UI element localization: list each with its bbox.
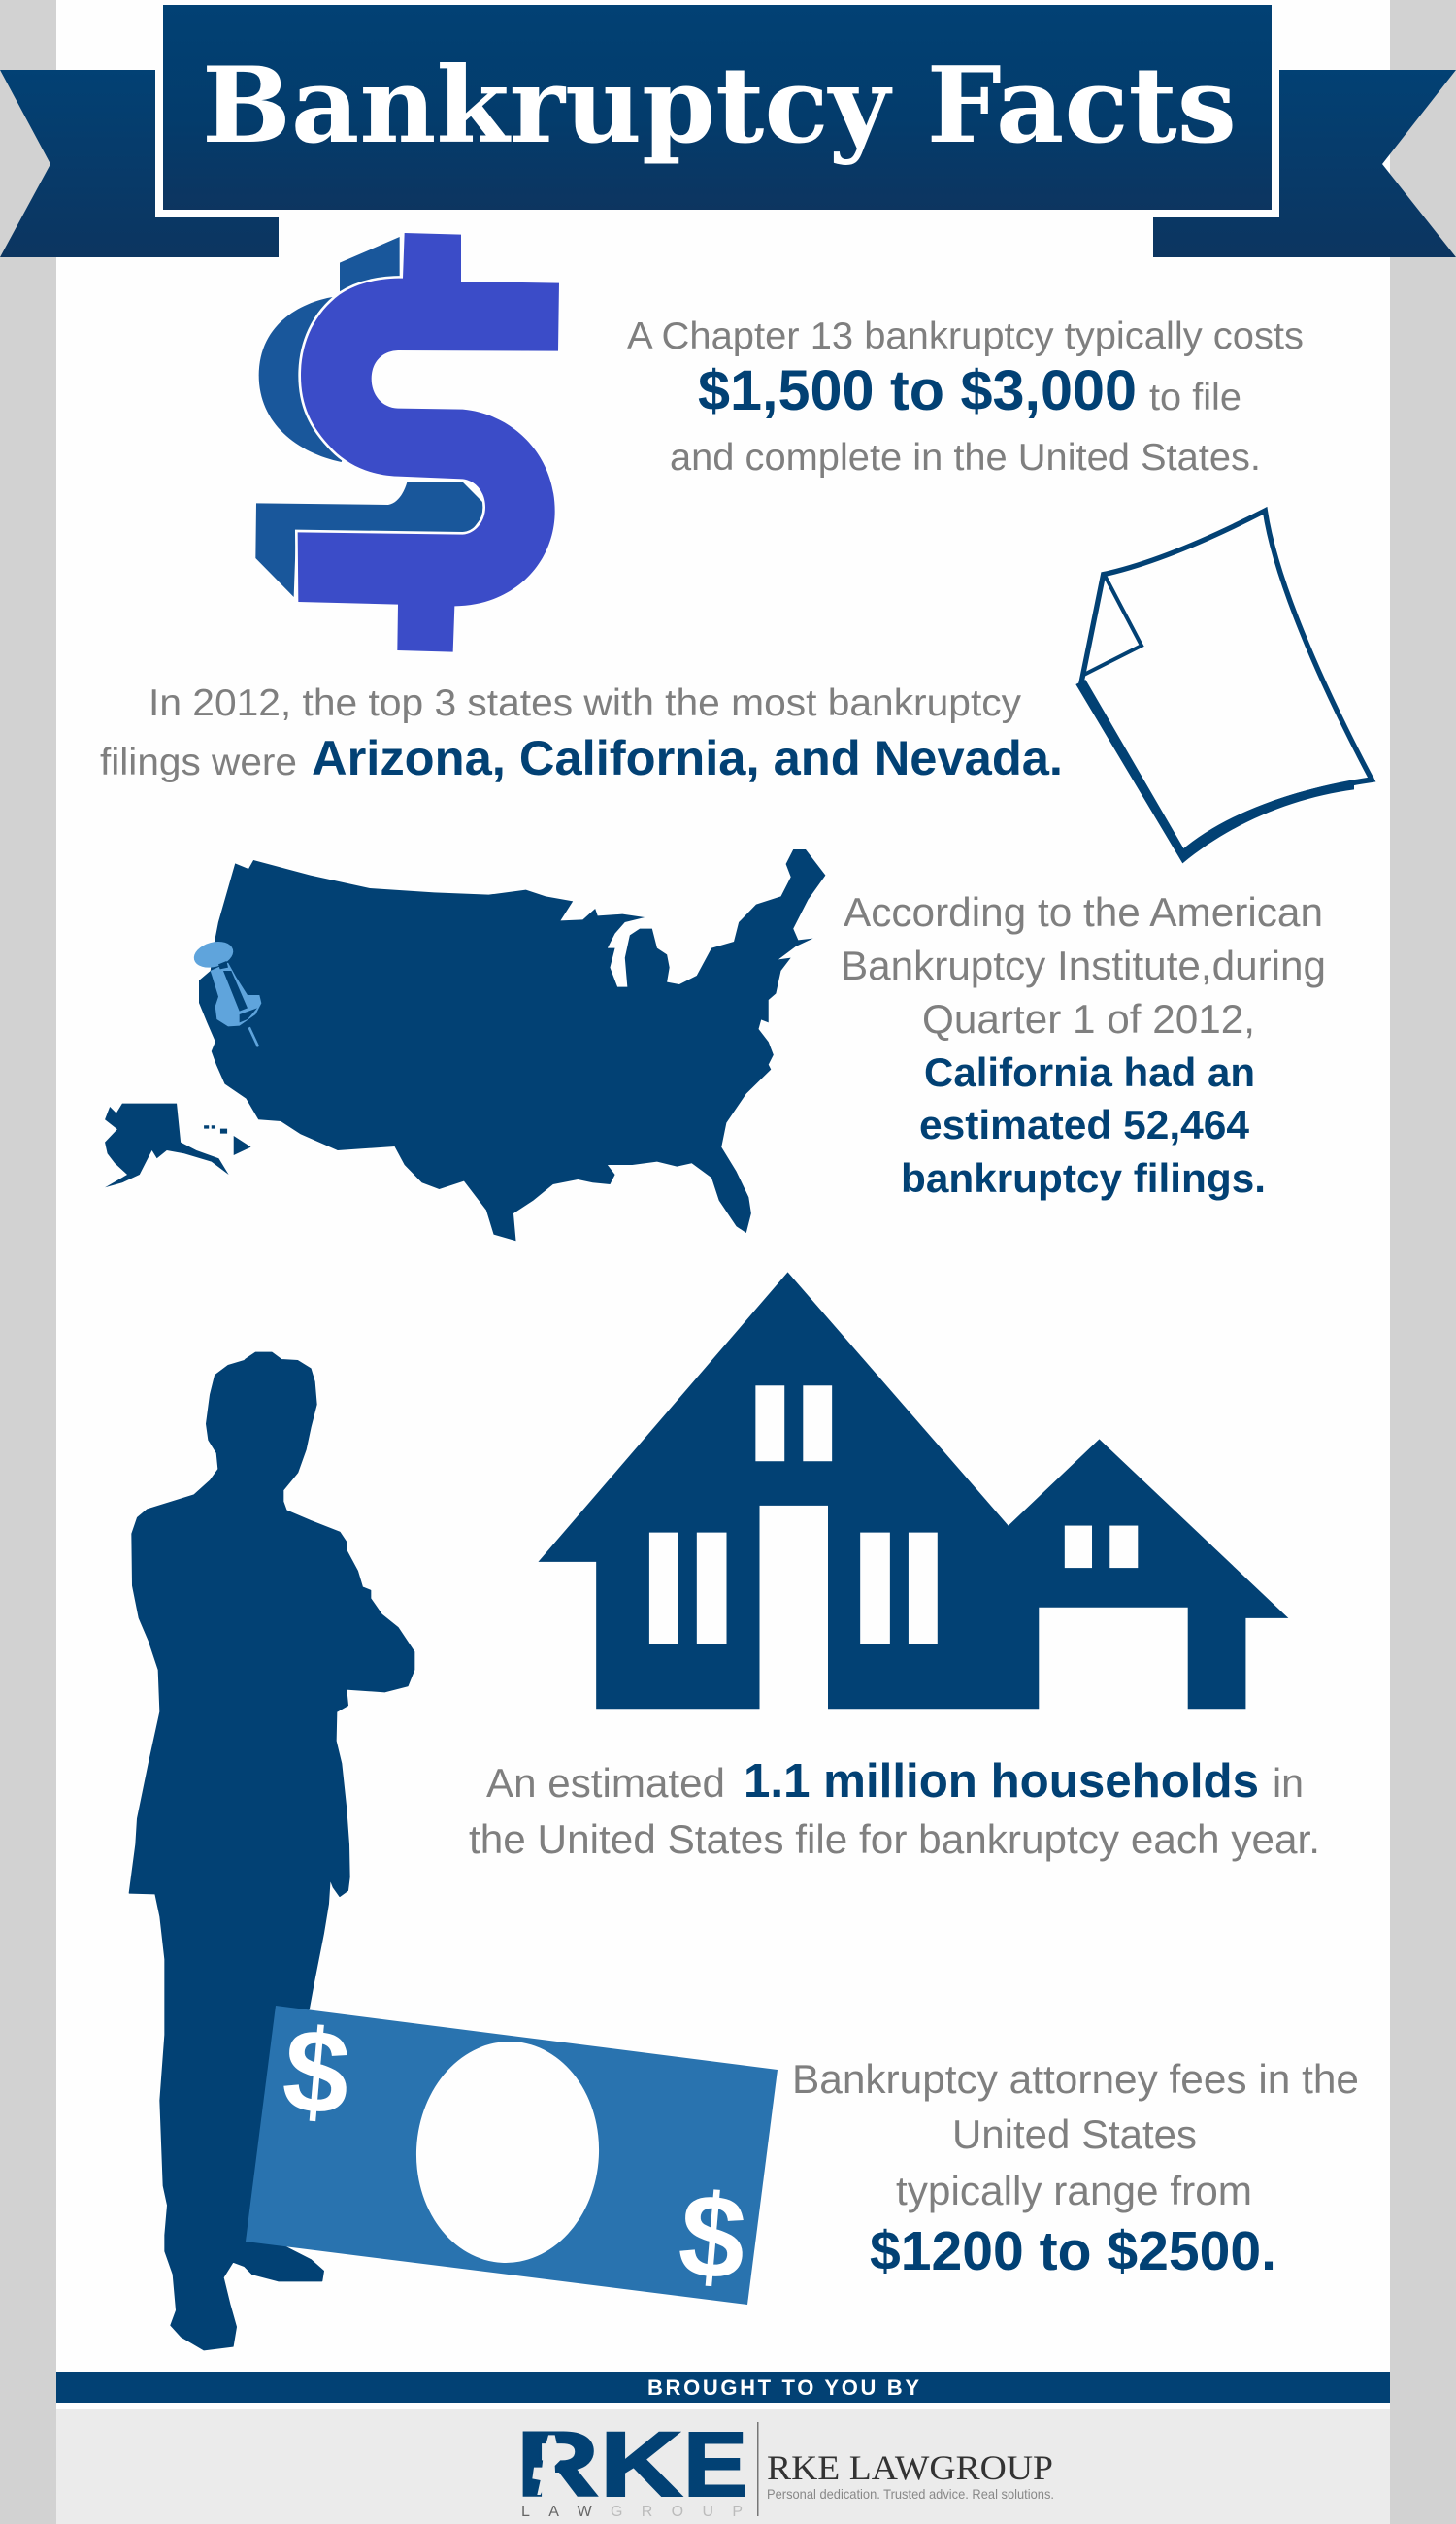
- banner right tail: [1153, 70, 1456, 257]
- logo mark: RKE: R: [516, 2413, 599, 2516]
- map: Alaska: [105, 1104, 229, 1187]
- firm tagline: Personal dedication. Trusted advice. Real solutions.: [767, 2486, 1054, 2502]
- fact 3 text: Quarter 1 of 2012,: [922, 996, 1255, 1042]
- fact 4 text: the United States file for bankruptcy each year.: [469, 1816, 1320, 1862]
- fact 2 text: [100, 682, 1063, 785]
- fact 5 text: [792, 2056, 1359, 2282]
- logo mark: RKE: E: [683, 2413, 747, 2516]
- fact 4 text: in: [1273, 1760, 1304, 1806]
- footer bar: brought to you by: BROUGHT TO YOU BY: [647, 2375, 919, 2400]
- house windows: [649, 1385, 1138, 1644]
- logo mark: RKE: K: [600, 2413, 682, 2516]
- icon: document page: [1075, 511, 1375, 863]
- fact 2 text: filings were: [100, 742, 297, 783]
- footer logo panel: [56, 2409, 1390, 2524]
- fact 3 text: According to the American: [844, 889, 1323, 935]
- fact 3 text: [841, 889, 1326, 1201]
- fact 3 text: estimated 52,464: [919, 1102, 1250, 1147]
- fact 5 text: Bankruptcy attorney fees in the: [792, 2056, 1359, 2102]
- fact 1 text: A Chapter 13 bankruptcy typically costs: [627, 316, 1304, 357]
- fact 3 text: bankruptcy filings.: [901, 1155, 1266, 1201]
- map: Hawaii: [204, 1125, 251, 1155]
- footer bar: brought to you by: [56, 2372, 1390, 2403]
- fact 2 text: Arizona, California, and Nevada.: [312, 731, 1063, 785]
- banner centre panel: [163, 5, 1272, 210]
- US map: [105, 849, 825, 1241]
- fact 5 text: United States: [952, 2111, 1197, 2157]
- icon: map pin: [191, 938, 261, 1046]
- fact 3 text: California had an: [924, 1049, 1255, 1095]
- logo lawgroup letters: LAW GROUP: [521, 2504, 743, 2520]
- fact 3 text: Bankruptcy Institute,during: [841, 943, 1326, 988]
- icon: dollar bill: $: [278, 2003, 355, 2141]
- icon: businessman silhouette: [129, 1352, 414, 2350]
- banner white border: [155, 0, 1279, 217]
- fact 1 text: [627, 316, 1304, 479]
- icon: house: [538, 1272, 1288, 1709]
- title: Bankruptcy Facts: [202, 45, 1237, 167]
- logo mark: RKE: [516, 2413, 747, 2516]
- fact 4 text: 1.1 million households: [744, 1755, 1259, 1808]
- banner left tail: [0, 70, 279, 257]
- fact 4 text: [469, 1755, 1320, 1862]
- house body: [538, 1272, 1288, 1709]
- fact 2 text: In 2012, the top 3 states with the most bankruptcy: [149, 682, 1022, 724]
- map: contiguous US: [199, 849, 825, 1241]
- icon: 3D dollar sign: [255, 233, 559, 652]
- icon: dollar bill: $: [674, 2168, 751, 2306]
- icon: dollar bill: [246, 2003, 778, 2306]
- fact 5 text: $1200 to $2500.: [870, 2220, 1276, 2282]
- fact 1 text: to file: [1149, 377, 1241, 418]
- title banner: [0, 0, 1456, 257]
- fact 1 text: $1,500 to $3,000: [698, 359, 1137, 422]
- fact 5 text: typically range from: [896, 2168, 1252, 2213]
- logo divider: [757, 2422, 759, 2516]
- fact 4 text: An estimated: [486, 1760, 725, 1806]
- firm name: RKE LAWGROUP: [767, 2448, 1053, 2487]
- fact 1 text: and complete in the United States.: [670, 437, 1261, 479]
